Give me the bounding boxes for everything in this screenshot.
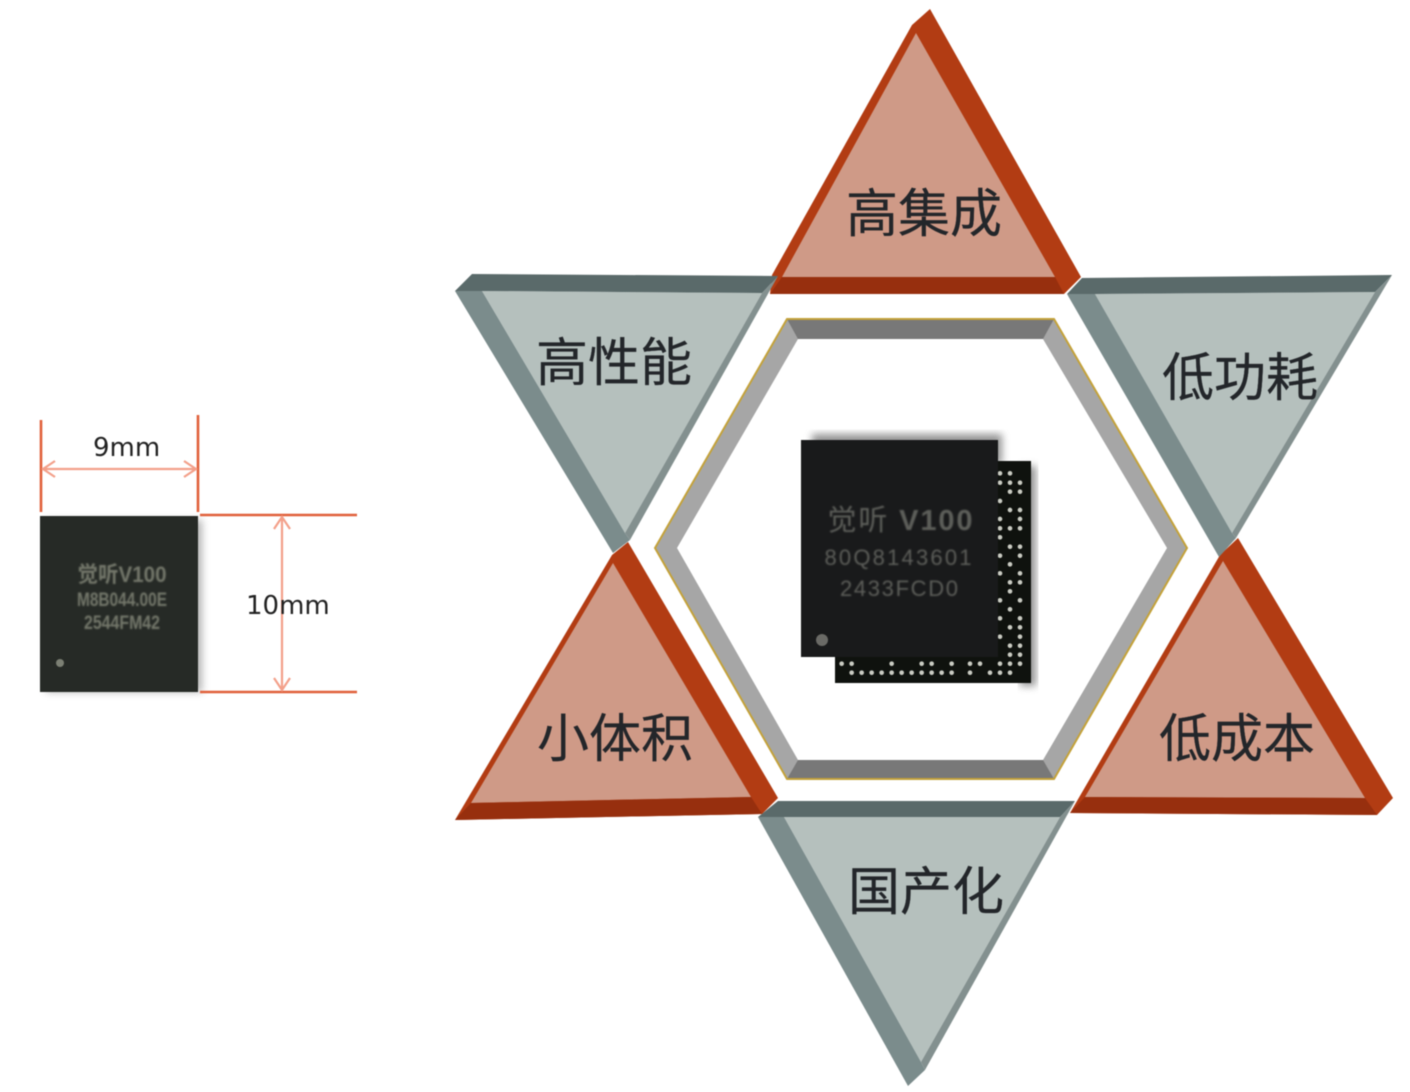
chip photo: 9mm by 10mm: 觉听V100 [78, 562, 166, 587]
triangle: 高集成: 高集成 [846, 186, 1002, 244]
chip top face: 觉听 V100 [828, 504, 972, 537]
height dimension: 10mm: 10mm [246, 591, 330, 621]
central chip: top and underside views [801, 434, 1036, 686]
height dimension: 10mm [200, 515, 357, 692]
chip top face: 80Q8143601 [824, 545, 972, 570]
chip photo: 9mm by 10mm: 2544FM42 [84, 613, 160, 634]
triangle: 国产化: 国产化 [848, 864, 1004, 922]
triangle: 高性能: 高性能 [536, 335, 692, 393]
triangle: 高性能 [455, 274, 778, 553]
chip top face: 2433FCD0 [840, 576, 958, 601]
triangle: 小体积: 小体积 [537, 711, 693, 769]
chip photo: 9mm by 10mm [40, 516, 202, 692]
triangle: 小体积 [455, 542, 778, 820]
triangle: 低成本: 低成本 [1159, 711, 1315, 769]
triangle: 低成本 [1070, 538, 1393, 815]
small chip with dimensions [40, 415, 357, 692]
chip underside with solder balls [835, 461, 1031, 683]
chip photo: 9mm by 10mm: M8B044.00E [77, 590, 167, 611]
chip top face [801, 440, 998, 657]
star diagram [455, 9, 1393, 1086]
triangle: 高集成 [770, 9, 1081, 294]
triangle: 国产化 [758, 801, 1075, 1086]
central hexagon frame [655, 319, 1187, 779]
triangle: 低功耗 [1067, 275, 1392, 557]
width dimension: 9mm: 9mm [93, 433, 160, 463]
width dimension: 9mm [41, 415, 198, 512]
triangle: 低功耗: 低功耗 [1162, 350, 1318, 408]
